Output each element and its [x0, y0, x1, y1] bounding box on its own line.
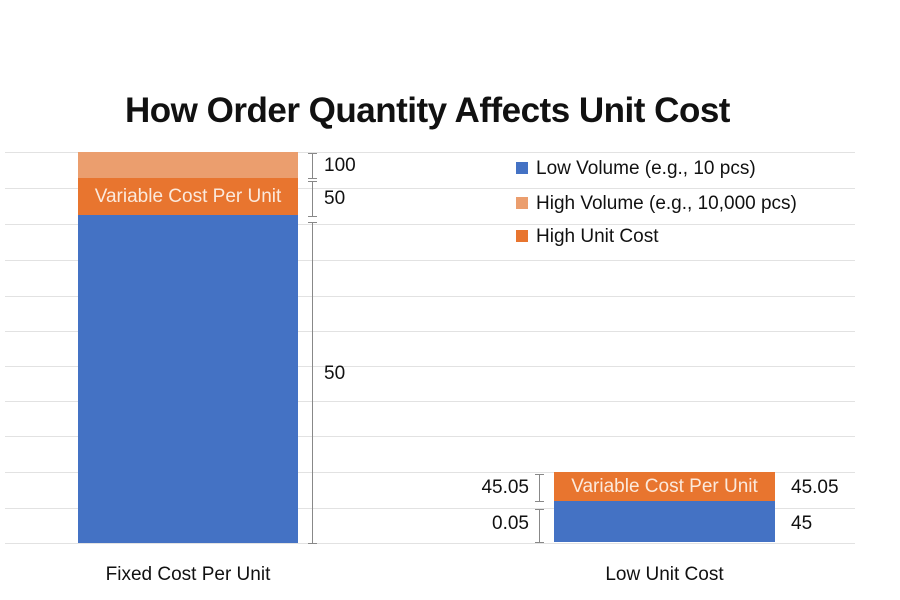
legend: High Unit Cost: [536, 226, 658, 247]
bar: low unit cost: [554, 472, 775, 542]
text: 50: [324, 363, 345, 384]
segment: fixed: [554, 501, 775, 542]
text: 0.05: [492, 513, 529, 534]
segment: variable cost: Variable Cost Per Unit: [95, 186, 281, 207]
segment: fixed: [78, 215, 298, 543]
segment: variable: Variable Cost Per Unit: [571, 476, 758, 497]
text: 45: [791, 513, 812, 534]
text: 50: [324, 188, 345, 209]
brackets left: [308, 153, 317, 179]
brackets right: [535, 474, 544, 502]
segment: high volume: [78, 152, 298, 178]
legend: [516, 158, 797, 247]
segment: variable cost: [78, 178, 298, 215]
value labels right: 45.05: [481, 477, 529, 498]
value labels left: 100: [324, 155, 356, 176]
text: 45.05: [791, 477, 839, 498]
bar: fixed cost per unit: [78, 152, 298, 543]
legend: Low Volume (e.g., 10 pcs): [536, 158, 756, 179]
x-axis labels: Fixed Cost Per Unit: [106, 564, 270, 585]
title: How Order Quantity Affects Unit Cost: [125, 91, 730, 130]
legend: High Volume (e.g., 10,000 pcs): [536, 193, 797, 214]
segment: variable: [554, 472, 775, 501]
text: Low Unit Cost: [605, 564, 724, 585]
